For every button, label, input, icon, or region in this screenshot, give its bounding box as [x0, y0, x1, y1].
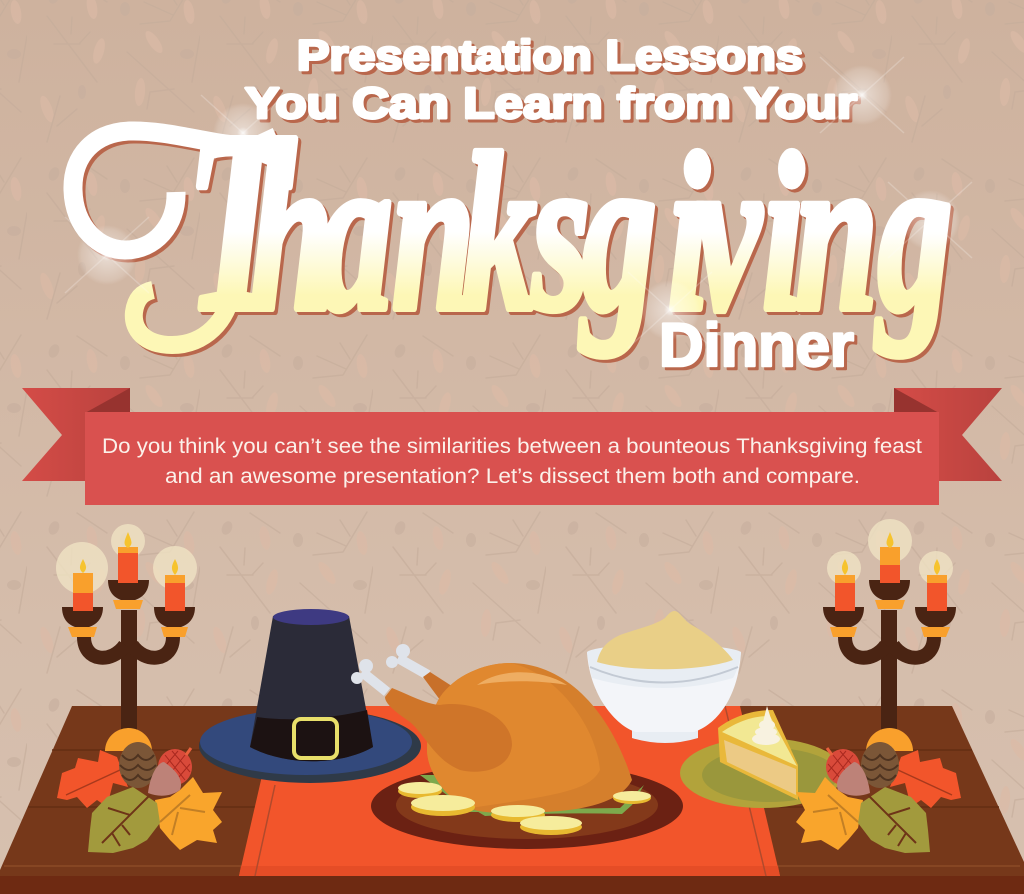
table runner	[239, 706, 780, 876]
heading: Presentation Lessons You Can Learn from Your: Presentation Lessons	[297, 32, 803, 80]
ribbon text: Do you think you can’t see the similarities between a bounteous Thanksgiving feast	[102, 435, 922, 458]
ribbon tails	[22, 388, 1002, 481]
turkey platter	[351, 644, 683, 849]
platter	[371, 763, 683, 849]
autumn leaves and acorn, right	[796, 742, 961, 853]
title	[73, 32, 952, 379]
mashed potato bowl	[587, 611, 741, 743]
heading: Thanksgiving: hanksgiving	[250, 109, 952, 358]
heading: Thanksgiving: T	[186, 79, 296, 365]
autumn leaves and acorn, left	[57, 742, 222, 853]
whipped cream	[752, 706, 780, 745]
heading: Presentation Lessons You Can Learn from Your: You Can Learn from Your	[245, 79, 857, 128]
sparkles	[65, 57, 972, 348]
left candelabra	[56, 524, 197, 730]
turkey drumsticks and body	[351, 644, 632, 813]
heading: Thanksgiving	[73, 79, 952, 365]
pilgrim hat	[199, 609, 421, 783]
candelabra bases over table	[105, 706, 913, 751]
wooden table	[0, 706, 1024, 894]
heading: Presentation Lessons You Can Learn from Your	[245, 32, 857, 128]
heading: Dinner: Dinner	[659, 311, 854, 379]
ribbon text	[102, 435, 922, 488]
right candelabra	[823, 519, 956, 730]
red ribbon banner	[22, 388, 1002, 505]
ribbon body	[85, 412, 939, 505]
potatoes	[398, 782, 651, 835]
pie plate and slice	[680, 706, 844, 808]
ribbon text: and an awesome presentation? Let’s dissect them both and compare.	[165, 465, 860, 488]
lettuce garnish	[420, 775, 644, 816]
